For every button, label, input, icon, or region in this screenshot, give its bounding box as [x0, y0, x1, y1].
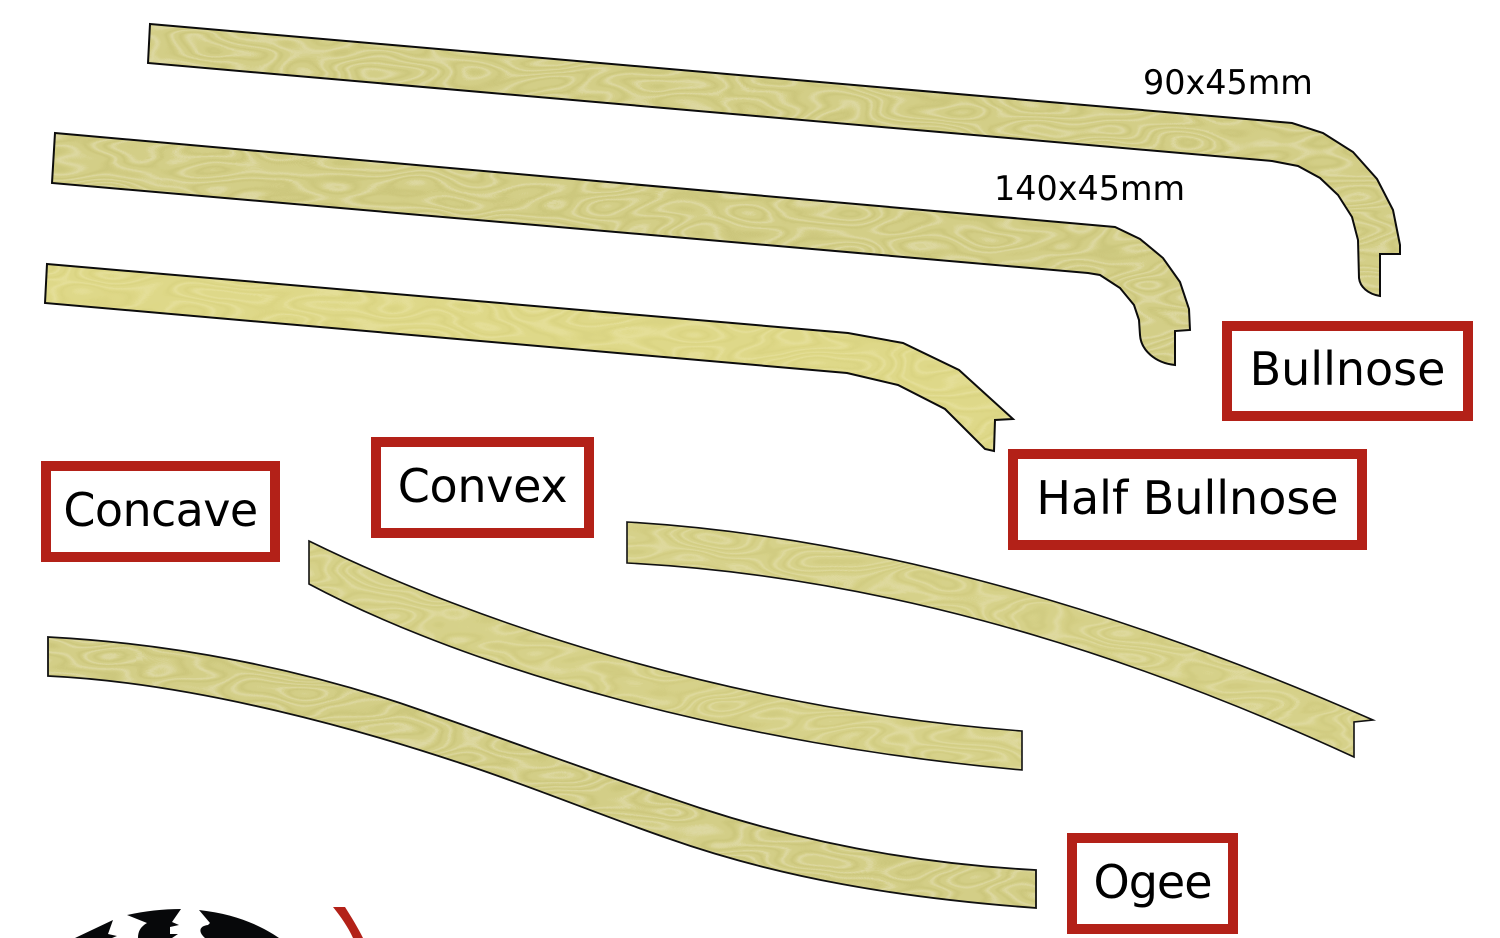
board: half bullnose	[40, 260, 1020, 455]
label: Concave	[41, 461, 280, 562]
board: 90x45mm bullnose	[140, 20, 1410, 300]
label: Half Bullnose	[1008, 449, 1367, 550]
label: Ogee: Ogee	[1093, 854, 1212, 908]
label: Bullnose	[1222, 321, 1473, 421]
label: Convex	[371, 437, 594, 538]
label: Convex: Convex	[398, 458, 567, 512]
dimension label: 140x45mm: 140x45mm	[994, 169, 1185, 208]
label: Concave: Concave	[63, 482, 258, 536]
label: Bullnose: Bullnose	[1250, 342, 1445, 396]
board: concave	[305, 536, 1027, 774]
label: Half Bullnose: Half Bullnose	[1036, 470, 1339, 524]
dimension label: 90x45mm: 90x45mm	[1143, 63, 1313, 102]
board: convex	[620, 518, 1380, 763]
logo: cropped black emblem and red arc	[75, 907, 363, 938]
board: 140x45mm bullnose	[45, 128, 1195, 370]
label: Ogee	[1067, 833, 1238, 934]
board: ogee	[44, 632, 1040, 912]
